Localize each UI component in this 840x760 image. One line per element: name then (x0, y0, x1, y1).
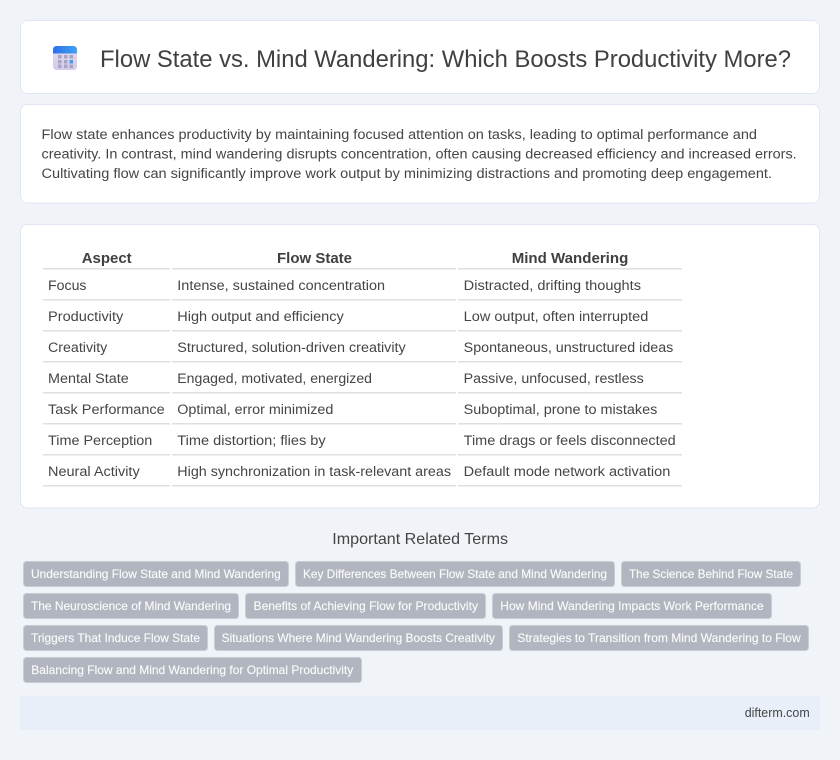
row: Neural Activity: Default mode network activation (464, 464, 670, 480)
row: Task Performance (48, 402, 657, 418)
row: Task Performance: Optimal, error minimized (177, 402, 333, 418)
tag: Situations Where Mind Wandering Boosts Creativity (222, 631, 495, 645)
tag (510, 626, 808, 650)
row: Productivity: Low output, often interrupted (464, 309, 648, 325)
row: Creativity: Spontaneous, unstructured ideas (464, 340, 673, 356)
row: Task Performance: Task Performance (48, 402, 165, 418)
tag (246, 594, 486, 618)
row: Productivity (48, 309, 648, 325)
row: Creativity (48, 340, 673, 356)
table header: Aspect (82, 250, 132, 267)
table header: Mind Wandering (512, 250, 628, 267)
tag: Triggers That Induce Flow State (31, 631, 200, 645)
tag: Strategies to Transition from Mind Wandering to Flow (517, 631, 801, 645)
tag: Key Differences Between Flow State and Mind Wandering (303, 567, 607, 581)
header panel (20, 20, 820, 94)
row: Creativity: Structured, solution-driven creativity (177, 340, 407, 356)
panel: summary paragraph (20, 104, 820, 203)
row: Time Perception: Time drags or feels disconnected (464, 433, 676, 449)
tag: Understanding Flow State and Mind Wandering (31, 567, 281, 581)
row: Neural Activity: High synchronization in task-relevant areas (177, 464, 451, 480)
panel: summary paragraph: Flow state enhances productivity by maintaining focused attention on tasks, leading to optimal performance and (42, 127, 757, 143)
tag (622, 562, 800, 586)
row: Task Performance: Suboptimal, prone to mistakes (464, 402, 657, 418)
footer bar (20, 696, 820, 730)
row: Productivity: High output and efficiency (177, 309, 345, 325)
row: Focus (48, 278, 641, 294)
footer site name: difterm.com (745, 706, 810, 720)
row: Creativity: Creativity (48, 340, 108, 356)
tag (24, 626, 208, 650)
tag (296, 562, 614, 586)
row: Focus: Focus (48, 278, 86, 294)
panel: comparison table (20, 224, 820, 508)
row: Mental State (48, 371, 644, 387)
heading: Important Related Terms: Important Related Terms (332, 531, 508, 548)
tag: Benefits of Achieving Flow for Productivity (254, 599, 478, 613)
tag (24, 658, 362, 682)
row: Focus: Intense, sustained concentration (177, 278, 385, 294)
row: Mental State: Engaged, motivated, energized (177, 371, 372, 387)
panel: summary paragraph: Cultivating flow can significantly improve work output by minimizing distractions and promoting deep engagement. (42, 166, 772, 182)
tag: Balancing Flow and Mind Wandering for Optimal Productivity (31, 663, 353, 677)
row: Focus: Distracted, drifting thoughts (464, 278, 641, 294)
table header: Flow State (277, 250, 352, 267)
row: Productivity: Productivity (48, 309, 124, 325)
tag: How Mind Wandering Impacts Work Performance (500, 599, 764, 613)
row: Time Perception: Time Perception (48, 433, 152, 449)
title: Flow State vs. Mind Wandering: Which Boosts Productivity More? (100, 46, 791, 73)
tag (214, 626, 502, 650)
table header (82, 250, 628, 267)
row: Time Perception: Time distortion; flies by (177, 433, 327, 449)
panel: summary paragraph: creativity. In contrast, mind wandering disrupts concentration, often causing decreased efficiency and increased errors. (42, 146, 797, 162)
tag: The Neuroscience of Mind Wandering (31, 599, 231, 613)
row: Mental State: Mental State (48, 371, 129, 387)
tag (24, 594, 238, 618)
tag (492, 594, 772, 618)
row: Time Perception (48, 433, 676, 449)
row: Mental State: Passive, unfocused, restless (464, 371, 644, 387)
row: Neural Activity (48, 464, 670, 480)
tag (24, 562, 288, 586)
icon: calendar (53, 46, 77, 70)
row: Neural Activity: Neural Activity (48, 464, 141, 480)
related term tags (24, 562, 808, 682)
tag: The Science Behind Flow State (629, 567, 793, 581)
